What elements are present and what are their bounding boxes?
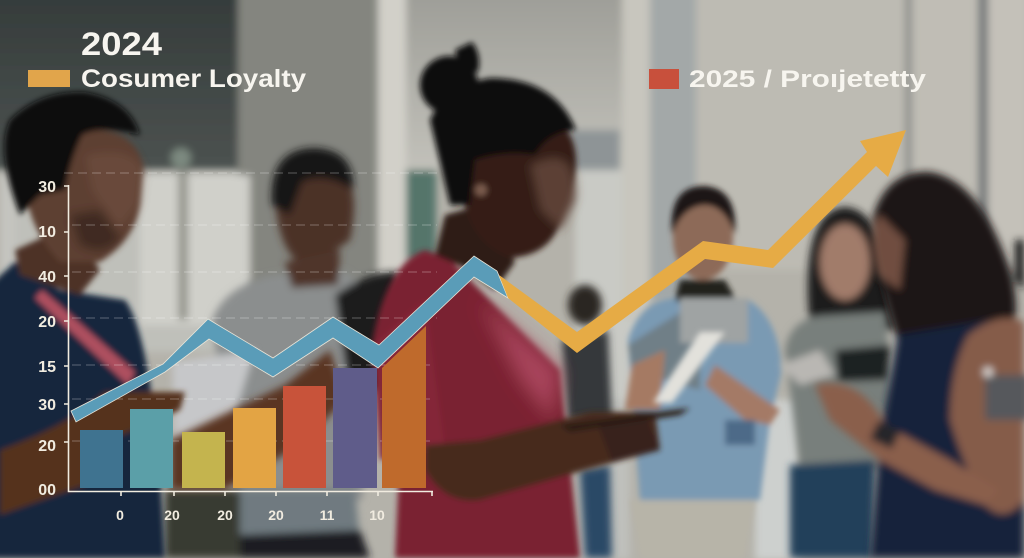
y-axis labels: 40: [38, 269, 56, 286]
x-axis labels: 20: [268, 507, 284, 523]
x-axis labels: 0: [116, 507, 124, 523]
y-axis labels: 00: [38, 482, 56, 499]
heading: 2024: 2024: [81, 26, 162, 62]
trend line 2024: blue: [71, 256, 508, 422]
trend arrow 2025: yellow: [499, 130, 906, 353]
tablet held by woman in blue: [653, 332, 725, 403]
y-axis labels: 15: [38, 359, 56, 376]
horizontal dashed gridlines: [64, 173, 437, 441]
chart overlay: [38, 130, 906, 523]
person: woman in blue shirt: [625, 186, 782, 558]
y-axis labels: 10: [38, 224, 56, 241]
x-axis labels: 20: [164, 507, 180, 523]
person: woman on the right in navy top: [815, 172, 1024, 558]
person: central woman in red shirt: [372, 42, 690, 558]
x-axis labels: 10: [369, 507, 385, 523]
person: left man in navy shirt: [0, 92, 185, 558]
swatch: 2025: [649, 69, 679, 89]
person: back left in grey shirt: [165, 148, 400, 558]
y-axis labels: 30: [38, 397, 56, 414]
legend: 2025 projection: [649, 66, 927, 93]
y-axis labels: 30: [38, 179, 56, 196]
y-axis labels: 20: [38, 438, 56, 455]
x-axis labels: 11: [320, 507, 335, 523]
hand of left man and brown arm: [170, 350, 345, 490]
x-axis labels: [116, 507, 385, 523]
label: consumer loyalty: Cosumer Loyalty: [81, 65, 306, 93]
person: woman in grey top: [780, 207, 895, 558]
tablet in front of grey shirt: [172, 350, 255, 445]
person: far back small figure: [562, 285, 612, 558]
legend: 2024 consumer loyalty: [28, 26, 306, 93]
swatch: 2024: [28, 70, 70, 87]
x-axis labels: 20: [217, 507, 233, 523]
y-axis labels: [38, 179, 56, 499]
bar chart: [80, 326, 426, 488]
label: 2025 projection: 2025 / Proıjetetty: [689, 66, 927, 93]
chart axes: [64, 185, 433, 496]
y-axis labels: 20: [38, 314, 56, 331]
